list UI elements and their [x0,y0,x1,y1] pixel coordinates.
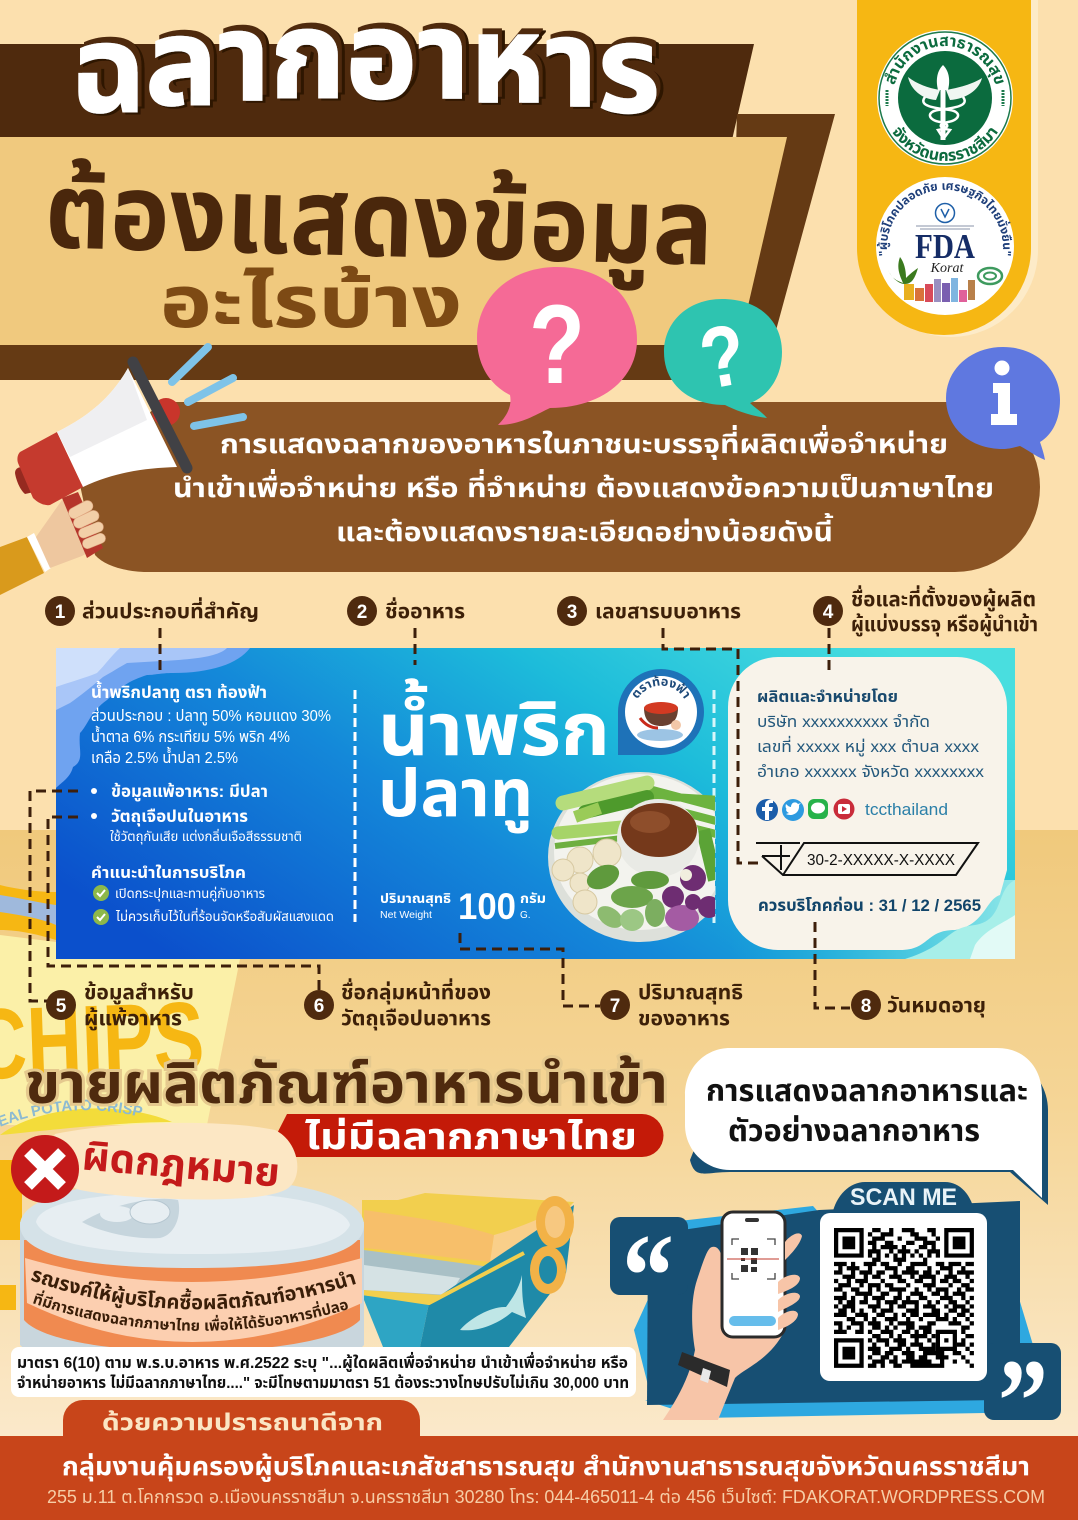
callout 7: net amount: ของอาหาร [638,1008,730,1030]
panel: manufacturer note: ควรบริโภคก่อน : 31 / 12 / 2565 [758,895,981,915]
panel: QR section [610,1182,1061,1467]
callout 1: ingredients [45,596,259,626]
footer tab [63,1400,420,1440]
callout 4: manufacturer: ผู้แบ่งบรรจุ หรือผู้นำเข้า [851,614,1038,636]
label: brand logo: ตราท้องฟ้า [632,676,690,699]
callout 6: additives [304,978,491,1030]
intro text [173,425,994,547]
decor: chips bag [0,885,240,1310]
callout 4: manufacturer: 4 [823,602,834,623]
label: net weight [380,886,546,927]
intro text: การแสดงฉลากของอาหารในภาชนะบรรจุที่ผลิตเพื่อจำหน่าย [220,425,948,460]
label: ingredients text: ส่วนประกอบ : ปลาทู 50% หอมแดง 30% [91,707,331,725]
callout 6: additives: ชื่อกลุ่มหน้าที่ของ [341,978,491,1004]
panel: manufacturer note: 30-2-XXXXX-X-XXXX [807,852,955,869]
callout 8: expiry date: 8 [861,996,871,1017]
panel: law text: จำหน่ายอาหาร ไม่มีฉลากภาษาไทย...." จะมีโทษตามมาตรา 51 ต้องระวางโทษปรับไม่เกิน 30,000 บาท [17,1374,629,1392]
label: ingredients text: น้ำตาล 6% กระเทียม 5% พริก 4% [91,725,290,746]
label: ingredients text: คำแนะนำในการบริโภค [91,865,246,882]
panel: law text: มาตรา 6(10) ตาม พ.ร.บ.อาหาร พ.ศ.2522 ระบุ "...ผู้ใดผลิตเพื่อจำหน่าย นำเข้าเพื่อจำหน่าย หรือ [17,1351,628,1373]
label: ingredients text: วัตถุเจือปนในอาหาร [111,807,248,827]
panel: law text [11,1347,636,1397]
callout 5: allergens: ข้อมูลสำหรับ [84,982,194,1004]
logo: provincial public health office seal: สำนักงานสาธารณสุข [884,36,1004,84]
panel: QR section: “ [622,1209,674,1342]
label: ingredients text [91,680,334,925]
callout 2: food name: ชื่ออาหาร [385,597,465,623]
callout 4: manufacturer: ชื่อและที่ตั้งของผู้ผลิต [851,585,1036,611]
callout 8: expiry date [851,990,986,1020]
label: product name [378,678,610,833]
heading: what: อะไรบ้าง [160,263,462,343]
icon: teal question bubble [664,299,782,418]
intro text: และต้องแสดงรายละเอียดอย่างน้อยดังนี้ [336,513,834,547]
panel: manufacturer note: ผลิตและจำหน่ายโดย [757,688,898,706]
label: ingredients text: เกลือ 2.5% น้ำปลา 2.5% [91,746,238,767]
callout 3: serial number: เลขสารบบอาหาร [595,601,741,623]
title ribbon: brown fold [0,114,835,380]
label: ingredients text: ใช้วัตถุกันเสีย แต่งกลิ่นเจือสีธรรมชาติ [110,828,302,844]
callout 1: ingredients: 1 [55,602,66,623]
illustration: closed can with campaign label: รณรงค์ให้ผู้บริโภคซื้อผลิตภัณฑ์อาหารนำเข้า [31,1270,356,1310]
footer tab: ด้วยความปรารถนาดีจาก [102,1409,383,1435]
callout 5: allergens: ผู้แพ้อาหาร [84,1008,182,1030]
banner: no Thai label [265,1114,664,1157]
speech bubble: label examples [685,1048,1048,1205]
callout 7: net amount: ปริมาณสุทธิ [638,982,743,1004]
banner: intro brown pill [80,402,1040,572]
callout connectors [30,628,850,1008]
panel: manufacturer note: อำเภอ xxxxxx จังหวัด xxxxxxxx [757,764,984,781]
panel: QR section: SCAN ME [850,1184,957,1211]
title ribbon: back dark band [0,44,754,140]
callout 6: additives: วัตถุเจือปนอาหาร [341,1008,491,1030]
QR code [834,1228,974,1368]
panel: example food label [56,648,1015,959]
panel: manufacturer note: เลขที่ xxxxx หมู่ xxx ตำบล xxxx [757,735,979,756]
intro text: นำเข้าเพื่อจำหน่าย หรือ ที่จำหน่าย ต้องแสดงข้อความเป็นภาษาไทย [173,469,994,503]
panel: manufacturer note [728,657,1007,950]
heading: must show what information: ต้องแสดงข้อมูล [44,152,715,293]
lower background band [0,830,1078,1440]
yellow side banner [857,0,1038,337]
food serial number stamp [756,843,978,875]
callout 7: net amount: 7 [610,996,620,1017]
label: net weight: 100 [458,886,516,927]
footer band: 255 ม.11 ต.โคกกรวด อ.เมืองนครราชสีมา จ.นครราชสีมา 30280 โทร: 044-465011-4 ต่อ 456 เว็บไซต์: FDAKORAT.WORDPRESS.COM [47,1487,1045,1507]
title ribbon: tan panel [0,137,787,345]
panel: QR section: ” [998,1334,1048,1467]
icon: megaphone with hand [0,347,243,595]
label: plate of chili dip and vegetables [548,772,732,942]
illustration: closed can with campaign label: ที่มีการแสดงฉลากภาษาไทย เพื่อให้ได้รับอาหารที่ปลอดภัย [33,1290,348,1331]
callout 4: manufacturer [813,585,1038,636]
logo: FDA Korat seal: "ผู้บริโภคปลอดภัย เศรษฐกิจไทยมั่งยืน" [876,183,1012,256]
speech bubble: label examples: ตัวอย่างฉลากอาหาร [728,1115,980,1148]
label: ingredients text: เปิดกระปุกและทานคู่กับอาหาร [115,886,265,901]
logo: FDA Korat seal: Korat [930,261,964,276]
badge: illegal: ผิดกฎหมาย [80,1135,282,1196]
footer band: กลุ่มงานคุ้มครองผู้บริโภคและเภสัชสาธารณสุข สำนักงานสาธารณสุขจังหวัดนครราชสีมา [62,1451,1030,1482]
label: ingredients text: น้ำพริกปลาทู ตรา ท้องฟ้า [91,680,267,703]
footer band [0,1436,1078,1520]
callout 5: allergens: 5 [56,996,67,1017]
illustration: hand holding phone [663,1212,802,1420]
decor: corner waves [905,880,1015,959]
callout 8: expiry date: วันหมดอายุ [887,995,986,1017]
icons: social media [756,798,854,821]
callout 7: net amount [600,982,743,1030]
callout 2: food name [347,596,465,626]
callout 2: food name: 2 [357,602,367,623]
logo: FDA Korat seal: FDA [915,227,976,266]
label: product name: ปลาทู [378,756,533,833]
callout 6: additives: 6 [314,996,324,1017]
icon: pink question bubble [477,267,637,425]
label: ingredients text: ข้อมูลแพ้อาหาร: มีปลา [111,782,268,802]
callout 3: serial number: 3 [567,602,577,623]
badge: illegal [11,1123,297,1203]
banner: no Thai label: ไม่มีฉลากภาษาไทย [305,1116,637,1157]
speech bubble: label examples: การแสดงฉลากอาหารและ [706,1075,1028,1108]
panel: manufacturer note: tccthailand [865,800,948,819]
label: brand logo [618,669,704,755]
callout 5: allergens [46,982,194,1030]
panel: manufacturer note: บริษัท xxxxxxxxxx จำกัด [757,714,930,731]
illustration: closed can with campaign label [20,1185,364,1347]
label: net weight: G. [520,910,531,921]
icon: info bubble [946,347,1060,460]
logo: provincial public health office seal: จังหวัดนครราชสีมา [892,127,998,161]
label: net weight: Net Weight [380,910,432,921]
logo: FDA Korat seal [876,177,1014,315]
callout 3: serial number [557,596,741,626]
label: net weight: ปริมาณสุทธิ [380,891,451,906]
logo: provincial public health office seal [877,30,1013,166]
callout 1: ingredients: ส่วนประกอบที่สำคัญ [82,597,259,623]
heading: selling imported food: ขายผลิตภัณฑ์อาหารนำเข้า [25,1052,668,1115]
label: product name: น้ำพริก [378,678,610,771]
icon: pink question bubble: ? [529,282,585,407]
illustration: open tin can [362,1193,574,1347]
label: ingredients text: ไม่ควรเก็บไว้ในที่ร้อนจัดหรือสัมผัสแสงแดด [115,907,334,924]
icon: teal question bubble: ? [693,306,753,408]
label: net weight: กรัม [520,891,546,906]
